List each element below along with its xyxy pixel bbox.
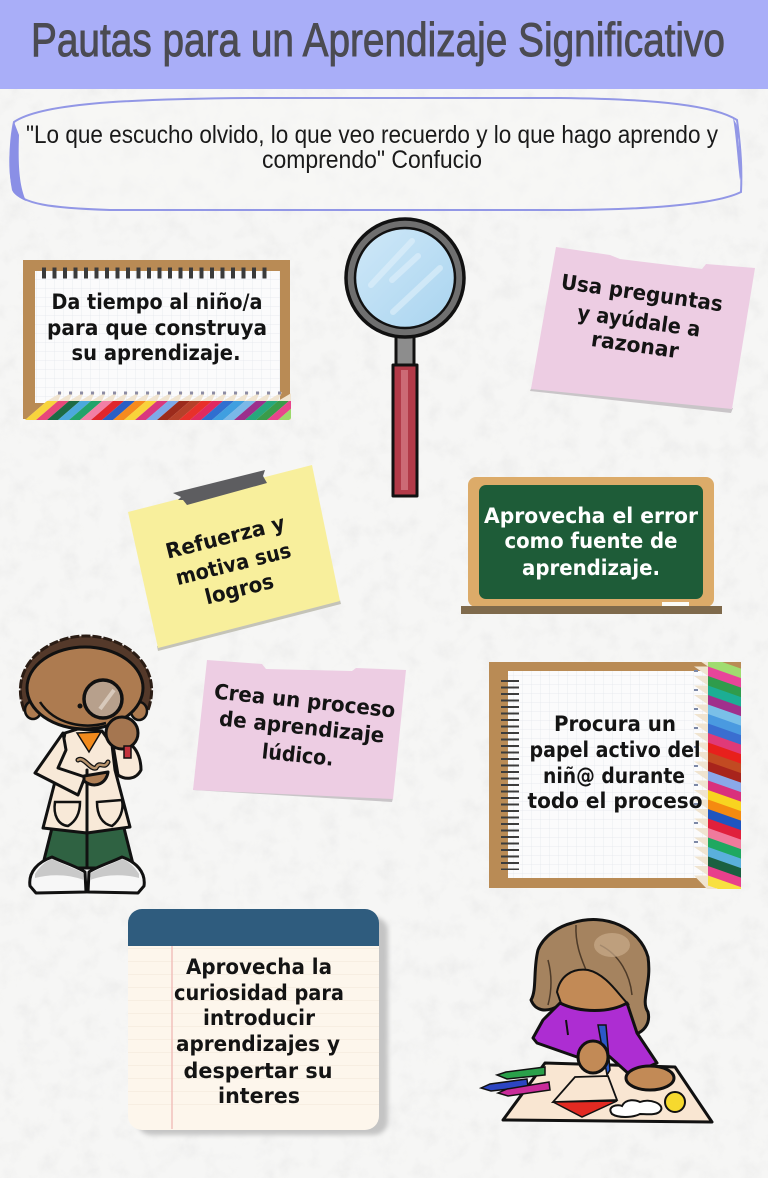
shoes [30,857,86,893]
tape [173,470,267,505]
notebook text: Da tiempo al niño/a [52,290,262,314]
panel: spiral notebook with pencils [23,260,311,420]
notepad text: introducir [203,1006,316,1030]
notepad text: aprendizajes y [176,1032,340,1056]
spiral binding [42,268,272,278]
notebook text: niñ@ durante [543,764,685,788]
lab coat [43,729,130,833]
note text [213,680,396,771]
quote text [26,121,718,174]
face [557,970,628,1014]
notepad text [174,955,344,1108]
held magnifier [84,680,122,718]
board text: aprendizaje. [522,556,660,580]
note text: logros [202,569,276,609]
hair [20,636,152,710]
shirt collar [77,732,101,752]
notebook text: todo el proceso [528,789,702,813]
notebook text [47,290,267,365]
purple sweater [533,1003,657,1075]
right hand [626,1066,674,1090]
note text: motiva sus [173,538,293,590]
worm and hand [84,772,108,785]
note text: Usa preguntas [560,270,724,316]
pencil row [25,392,311,420]
notebook text: para que construya [47,316,267,340]
illustration: girl drawing [481,920,712,1122]
note text: Refuerza y [163,511,288,564]
quote text: comprendo" Confucio [262,146,482,174]
icon: magnifying glass [346,219,464,496]
notebook text [528,712,702,813]
title banner [0,0,768,89]
panel: pink note playful [193,660,406,802]
panel: lined notepad [128,909,388,1135]
face [27,647,143,729]
ear right [131,702,147,720]
note text: lúdico. [261,739,335,771]
notepad text: curiosidad para [174,981,344,1005]
notebook text: Procura un [554,712,676,736]
notepad text: despertar su [184,1059,332,1083]
note text: de aprendizaje [218,706,386,748]
panel: quote [9,98,741,210]
panel: pink note questions [530,247,755,413]
paper drawing [553,1076,617,1102]
ears [25,701,41,719]
notebook text: papel activo del [530,738,700,762]
board text: Aprovecha el error [484,504,699,528]
notebook text: su aprendizaje. [72,341,240,365]
panel: yellow note achievements [128,465,341,651]
note text [163,511,293,609]
paper [503,1063,712,1122]
note text: Crea un proceso [213,680,396,722]
pencil column [694,662,741,889]
note text [560,270,724,363]
hair [531,920,649,1034]
note text: razonar [590,327,681,363]
board text: como fuente de [504,529,678,553]
notepad text: Aprovecha la [186,955,332,979]
spiral binding [501,680,519,870]
note text: y ayúdale a [576,301,702,342]
sleeves [35,733,85,795]
panel: square notebook with pencils [489,657,745,898]
panel: chalkboard [461,477,722,614]
left hand [578,1041,608,1073]
hair highlight [594,933,630,957]
illustration: boy scientist [20,636,152,893]
trousers [42,828,134,868]
board text [484,504,699,580]
blue pencil [598,1025,610,1075]
loose pencils [481,1067,550,1096]
notepad text: interes [218,1084,300,1108]
